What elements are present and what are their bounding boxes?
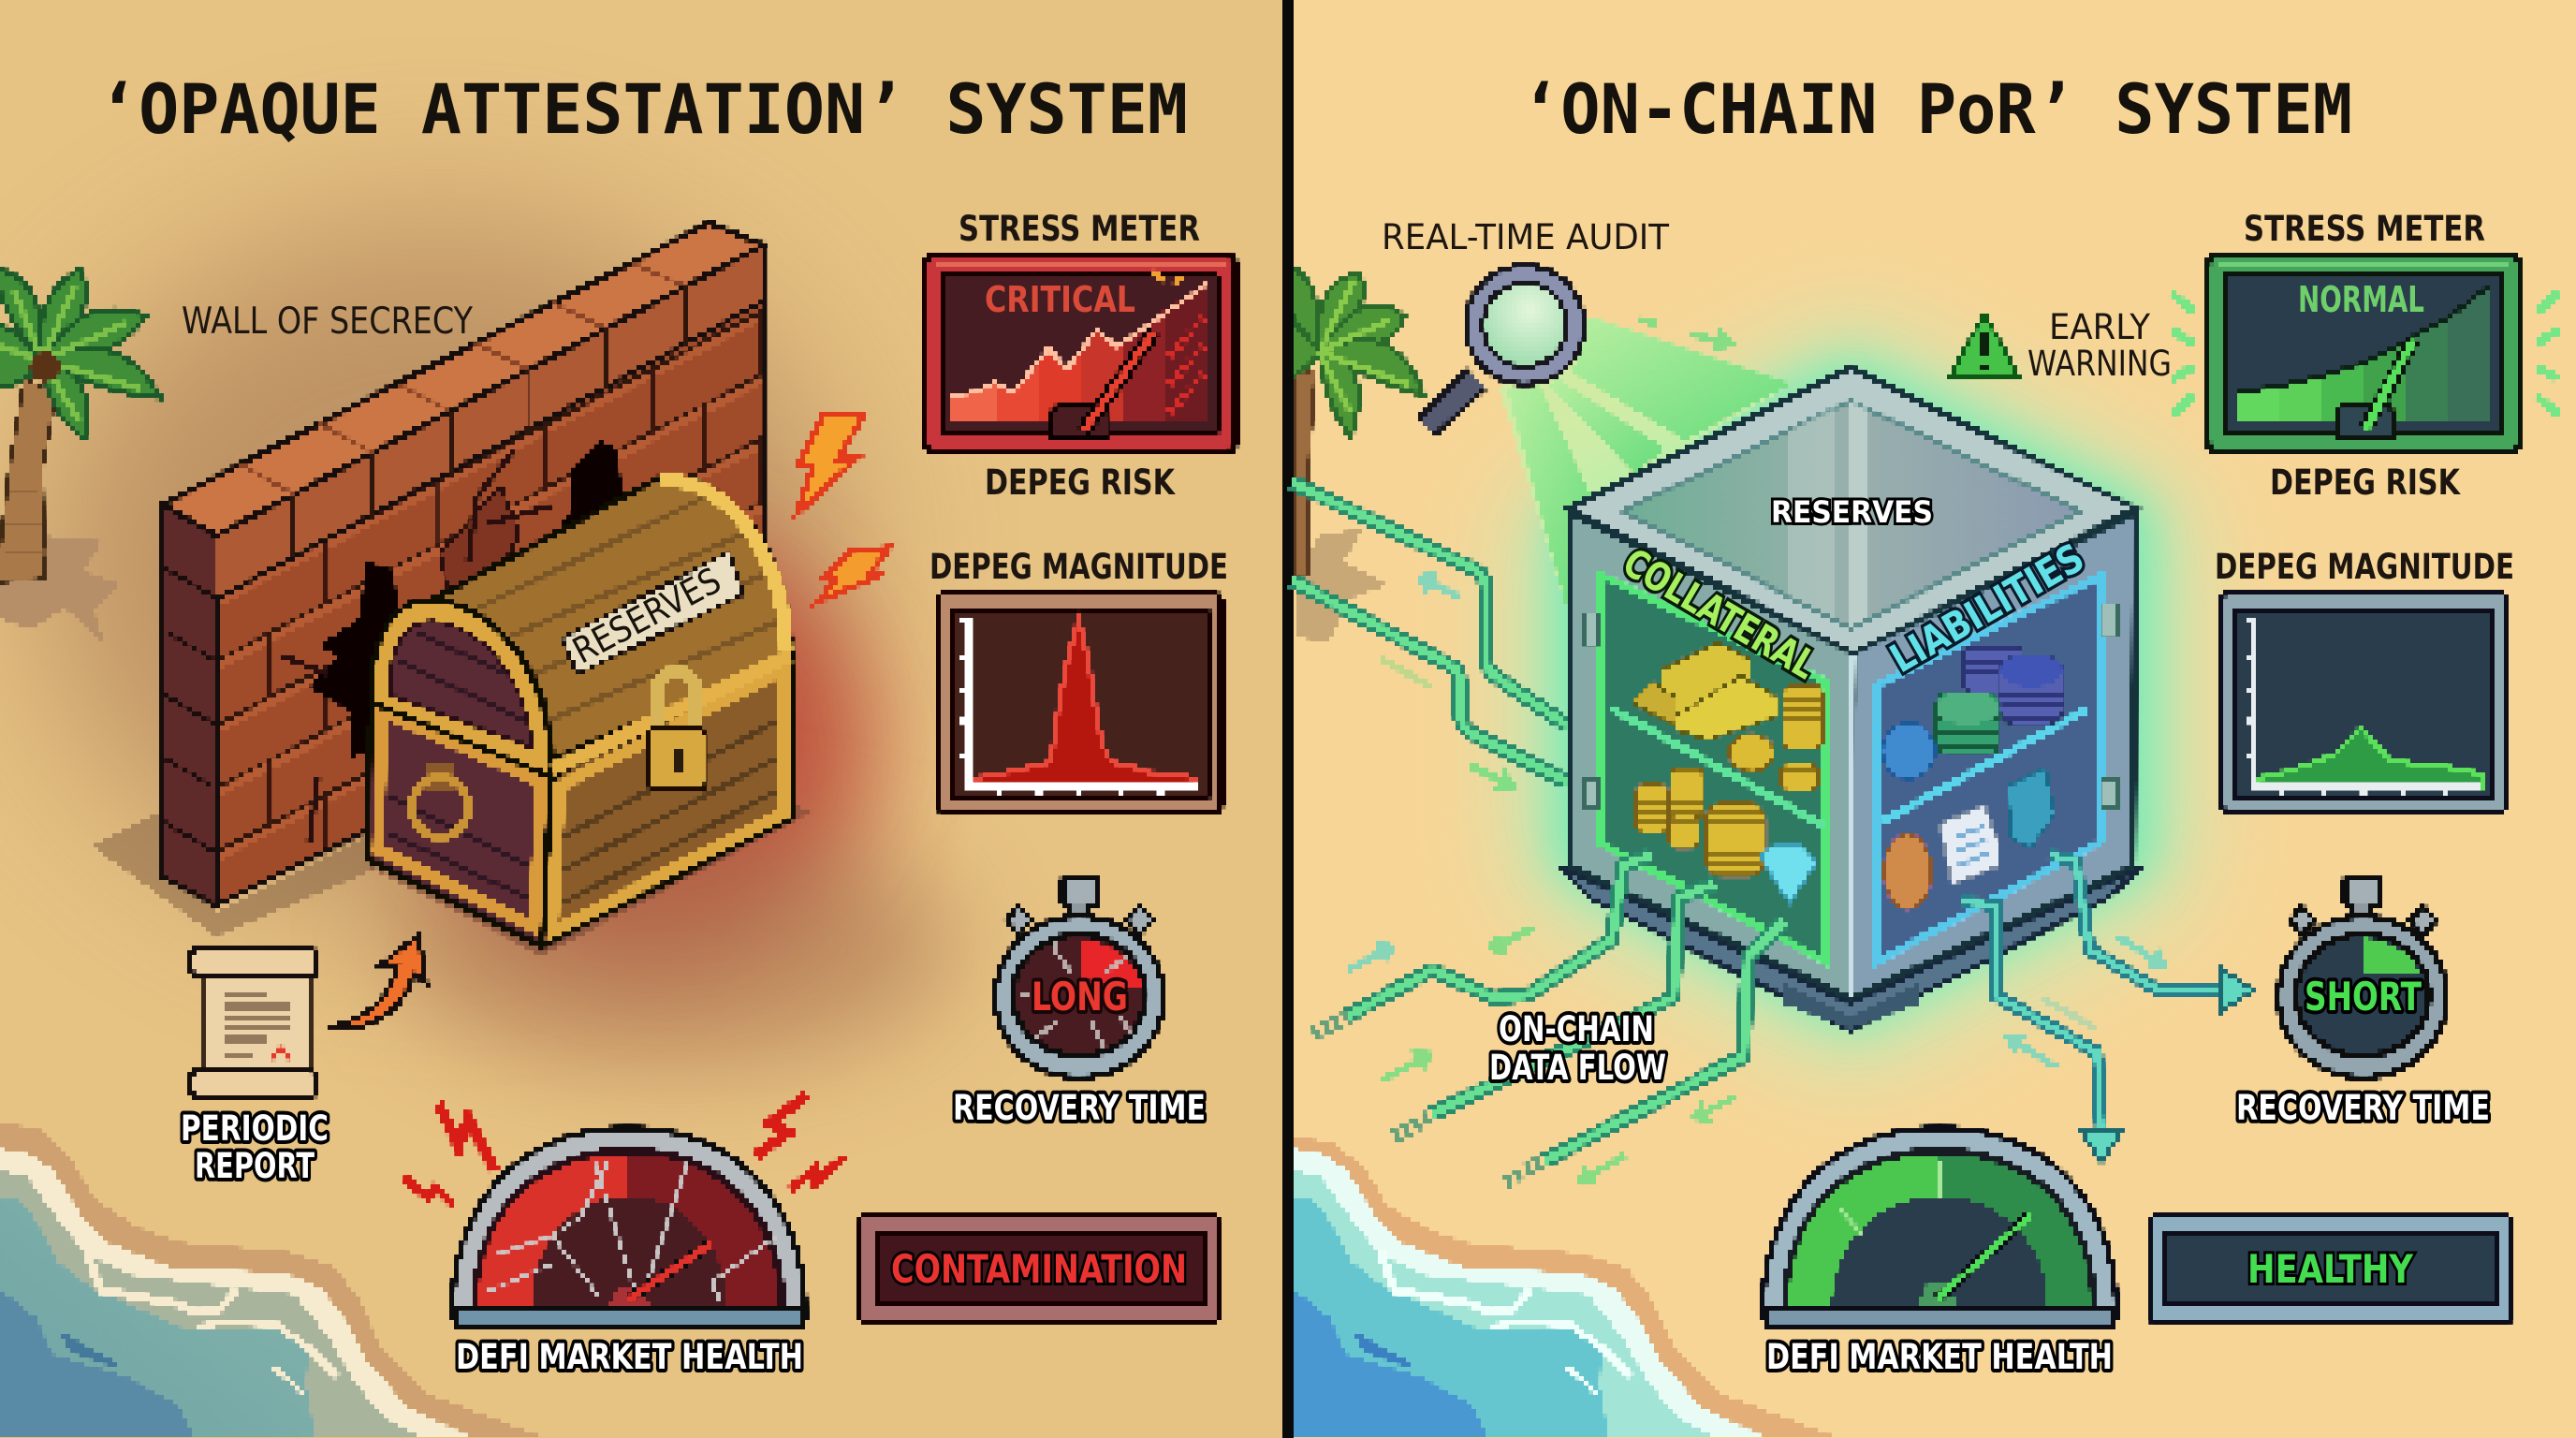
chart: depeg magnitude small bump <box>2218 591 2510 814</box>
palm tree left <box>0 270 161 641</box>
panel: opaque attestation system <box>0 0 1282 1438</box>
label: defi market health right: DEFI MARKET HEALTH <box>1766 1337 2113 1377</box>
vault label collateral: COLLATERAL <box>1616 539 1824 688</box>
label: early warning <box>2027 307 2172 384</box>
status text contamination: CONTAMINATION <box>891 1246 1187 1292</box>
collateral window <box>1601 575 1825 961</box>
warning icon <box>1951 314 2018 375</box>
label: recovery time right: RECOVERY TIME <box>2236 1088 2490 1128</box>
label: on-chain data flow <box>1489 1009 1666 1088</box>
title left: ‘OPAQUE ATTESTATION’ SYSTEM <box>98 70 1188 150</box>
gold band <box>552 655 791 770</box>
chart: depeg magnitude spike <box>934 591 1224 814</box>
icon: magnifying glass <box>1427 274 1575 427</box>
vault label reserves: RESERVES <box>1771 494 1933 530</box>
red glow behind chest <box>440 534 871 964</box>
gold bars <box>1632 642 1778 740</box>
label: recovery time left: RECOVERY TIME <box>953 1088 1206 1128</box>
chest lid top <box>432 477 791 759</box>
chest lid side arch <box>371 600 552 777</box>
vault label liabilities: LIABILITIES <box>1882 535 2092 682</box>
arrow: report to chest <box>329 935 426 1028</box>
stress meter normal <box>2204 252 2525 455</box>
chest ring handle <box>412 763 468 837</box>
vault top face <box>1570 368 2135 653</box>
chest right face <box>542 660 791 946</box>
label: periodic report <box>181 1108 329 1186</box>
shadow haze around wall <box>37 215 842 908</box>
collateral shelf <box>1612 709 1825 827</box>
label: defi market health left: DEFI MARKET HEALTH <box>456 1337 803 1377</box>
status box: contamination <box>858 1213 1220 1326</box>
outer pale glow around vault <box>1526 328 2181 1067</box>
status text healthy: HEALTHY <box>2247 1246 2413 1292</box>
liabilities window <box>1878 575 2102 961</box>
label: real-time audit: REAL-TIME AUDIT <box>1382 217 1669 257</box>
label: on-chain data flow: ON-CHAIN <box>1499 1009 1654 1049</box>
chest label plate <box>562 551 743 674</box>
center divider <box>1282 0 1294 1438</box>
chest label text: RESERVES <box>566 560 727 671</box>
meter sparks <box>2172 293 2558 415</box>
meter status text: CRITICAL <box>985 279 1135 320</box>
meter status text right: NORMAL <box>2298 279 2424 320</box>
output connectors <box>1962 855 2220 1130</box>
diamond <box>1760 845 1817 903</box>
icon: healthy market gauge <box>1763 1128 2116 1326</box>
stopwatch text short: SHORT <box>2305 974 2422 1020</box>
data flow lines into vault bottom <box>1314 855 1785 1181</box>
output arrowheads <box>2081 968 2253 1163</box>
status box: healthy <box>2149 1213 2512 1326</box>
chest left face <box>368 702 550 946</box>
audit beams <box>1500 316 1792 609</box>
label: stress meter right: STRESS METER <box>2244 209 2485 249</box>
label: stress meter: STRESS METER <box>959 209 1200 249</box>
label: on-chain data flow: DATA FLOW <box>1489 1048 1666 1088</box>
padlock <box>648 672 707 790</box>
label: periodic report: PERIODIC <box>181 1108 329 1149</box>
label: early warning: WARNING <box>2027 344 2172 384</box>
meter frame <box>920 252 1239 455</box>
label: depeg risk right: DEPEG RISK <box>2270 462 2461 503</box>
brown haze below chest <box>393 824 955 1067</box>
ocean and shoreline left <box>0 1122 552 1438</box>
green glow around vault <box>1554 356 2153 1030</box>
corner highlight <box>1851 655 1852 998</box>
vault right face <box>1851 513 2135 998</box>
label: wall of secrecy: WALL OF SECRECY <box>182 301 473 343</box>
palm tree right <box>1294 267 1427 641</box>
data flow lines behind vault <box>1292 482 1567 782</box>
stopwatch text long: LONG <box>1032 974 1128 1020</box>
title right: ‘ON-CHAIN PoR’ SYSTEM <box>1521 70 2352 150</box>
gold coins <box>1636 685 1822 876</box>
meter frame right <box>2204 252 2525 455</box>
label: depeg magnitude: DEPEG MAGNITUDE <box>929 547 1228 587</box>
vault base and feet <box>1559 866 2144 1030</box>
token stacks <box>1882 646 2063 779</box>
icon: treasure chest reserves <box>368 477 813 956</box>
icon: stopwatch short <box>2278 877 2447 1078</box>
hinges <box>1584 604 2117 807</box>
icon: stopwatch long <box>995 877 1164 1078</box>
icon: cracked market gauge with sparks <box>404 1095 844 1326</box>
sand background left <box>0 0 1282 1438</box>
sand background right <box>1294 0 2576 1438</box>
small flow arrows <box>1348 319 2158 1178</box>
liabilities shelf <box>1883 709 2088 821</box>
ocean and shoreline right <box>1294 1137 1846 1438</box>
output connector highlights <box>1962 855 2220 1130</box>
label: depeg risk: DEPEG RISK <box>985 462 1176 503</box>
vault left face <box>1570 513 1853 998</box>
icon: brick wall <box>93 223 763 936</box>
stress meter critical <box>920 252 1239 455</box>
icon: transparent reserve vault <box>1559 368 2253 1163</box>
cracks in the wall <box>281 440 646 843</box>
panel: on-chain por system <box>1259 0 2576 1438</box>
label: periodic report: REPORT <box>195 1146 315 1186</box>
documents and coin <box>1884 768 2055 909</box>
icon: lightning bolts near chest <box>798 415 889 601</box>
label: early warning: EARLY <box>2049 307 2150 347</box>
icon: periodic report scroll <box>191 947 316 1098</box>
